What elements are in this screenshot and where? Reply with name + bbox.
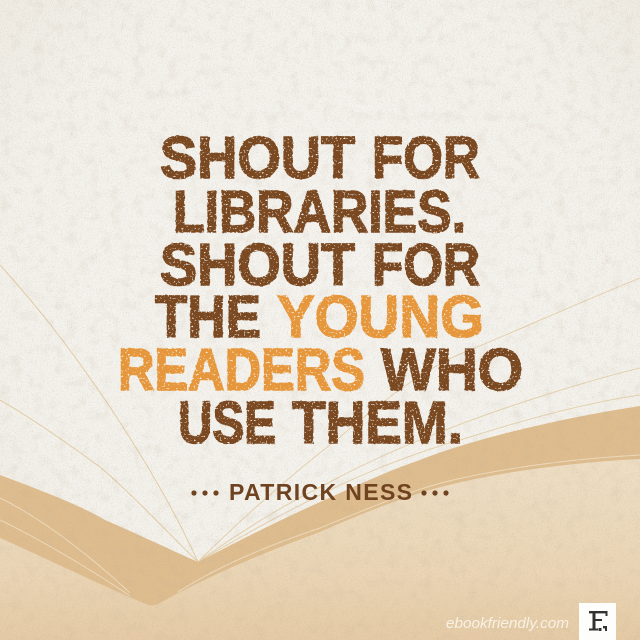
line 4 (155, 283, 484, 350)
attribution (191, 479, 449, 505)
line 6: USE (178, 389, 276, 456)
line 3: SHOUT (160, 231, 355, 298)
logo badge (579, 603, 616, 640)
page lines inside the band (0, 455, 640, 596)
line 1: SHOUT (160, 124, 355, 191)
line 1 (160, 124, 480, 191)
quote text (118, 124, 523, 456)
author name: PATRICK NESS (229, 479, 412, 505)
page lines: right fan (198, 278, 640, 562)
line 3: FOR (372, 231, 480, 298)
line 6: THEM. (292, 389, 463, 456)
line 3 (160, 231, 480, 298)
line 6 (178, 389, 463, 456)
logo glyph (589, 611, 608, 631)
left dots (191, 490, 219, 496)
page lines: left fan (0, 265, 198, 562)
line 4: YOUNG (277, 283, 484, 350)
line 2: LIBRARIES. (173, 178, 466, 245)
line 5: READERS (118, 336, 365, 403)
open book: darker page edge band (0, 406, 640, 640)
line 4: THE (155, 283, 261, 350)
open book: front pages (0, 459, 640, 640)
website credit: ebookfriendly.com (446, 615, 569, 632)
right dots (421, 490, 449, 496)
line 1: FOR (372, 124, 480, 191)
line 5: WHO (381, 336, 523, 403)
